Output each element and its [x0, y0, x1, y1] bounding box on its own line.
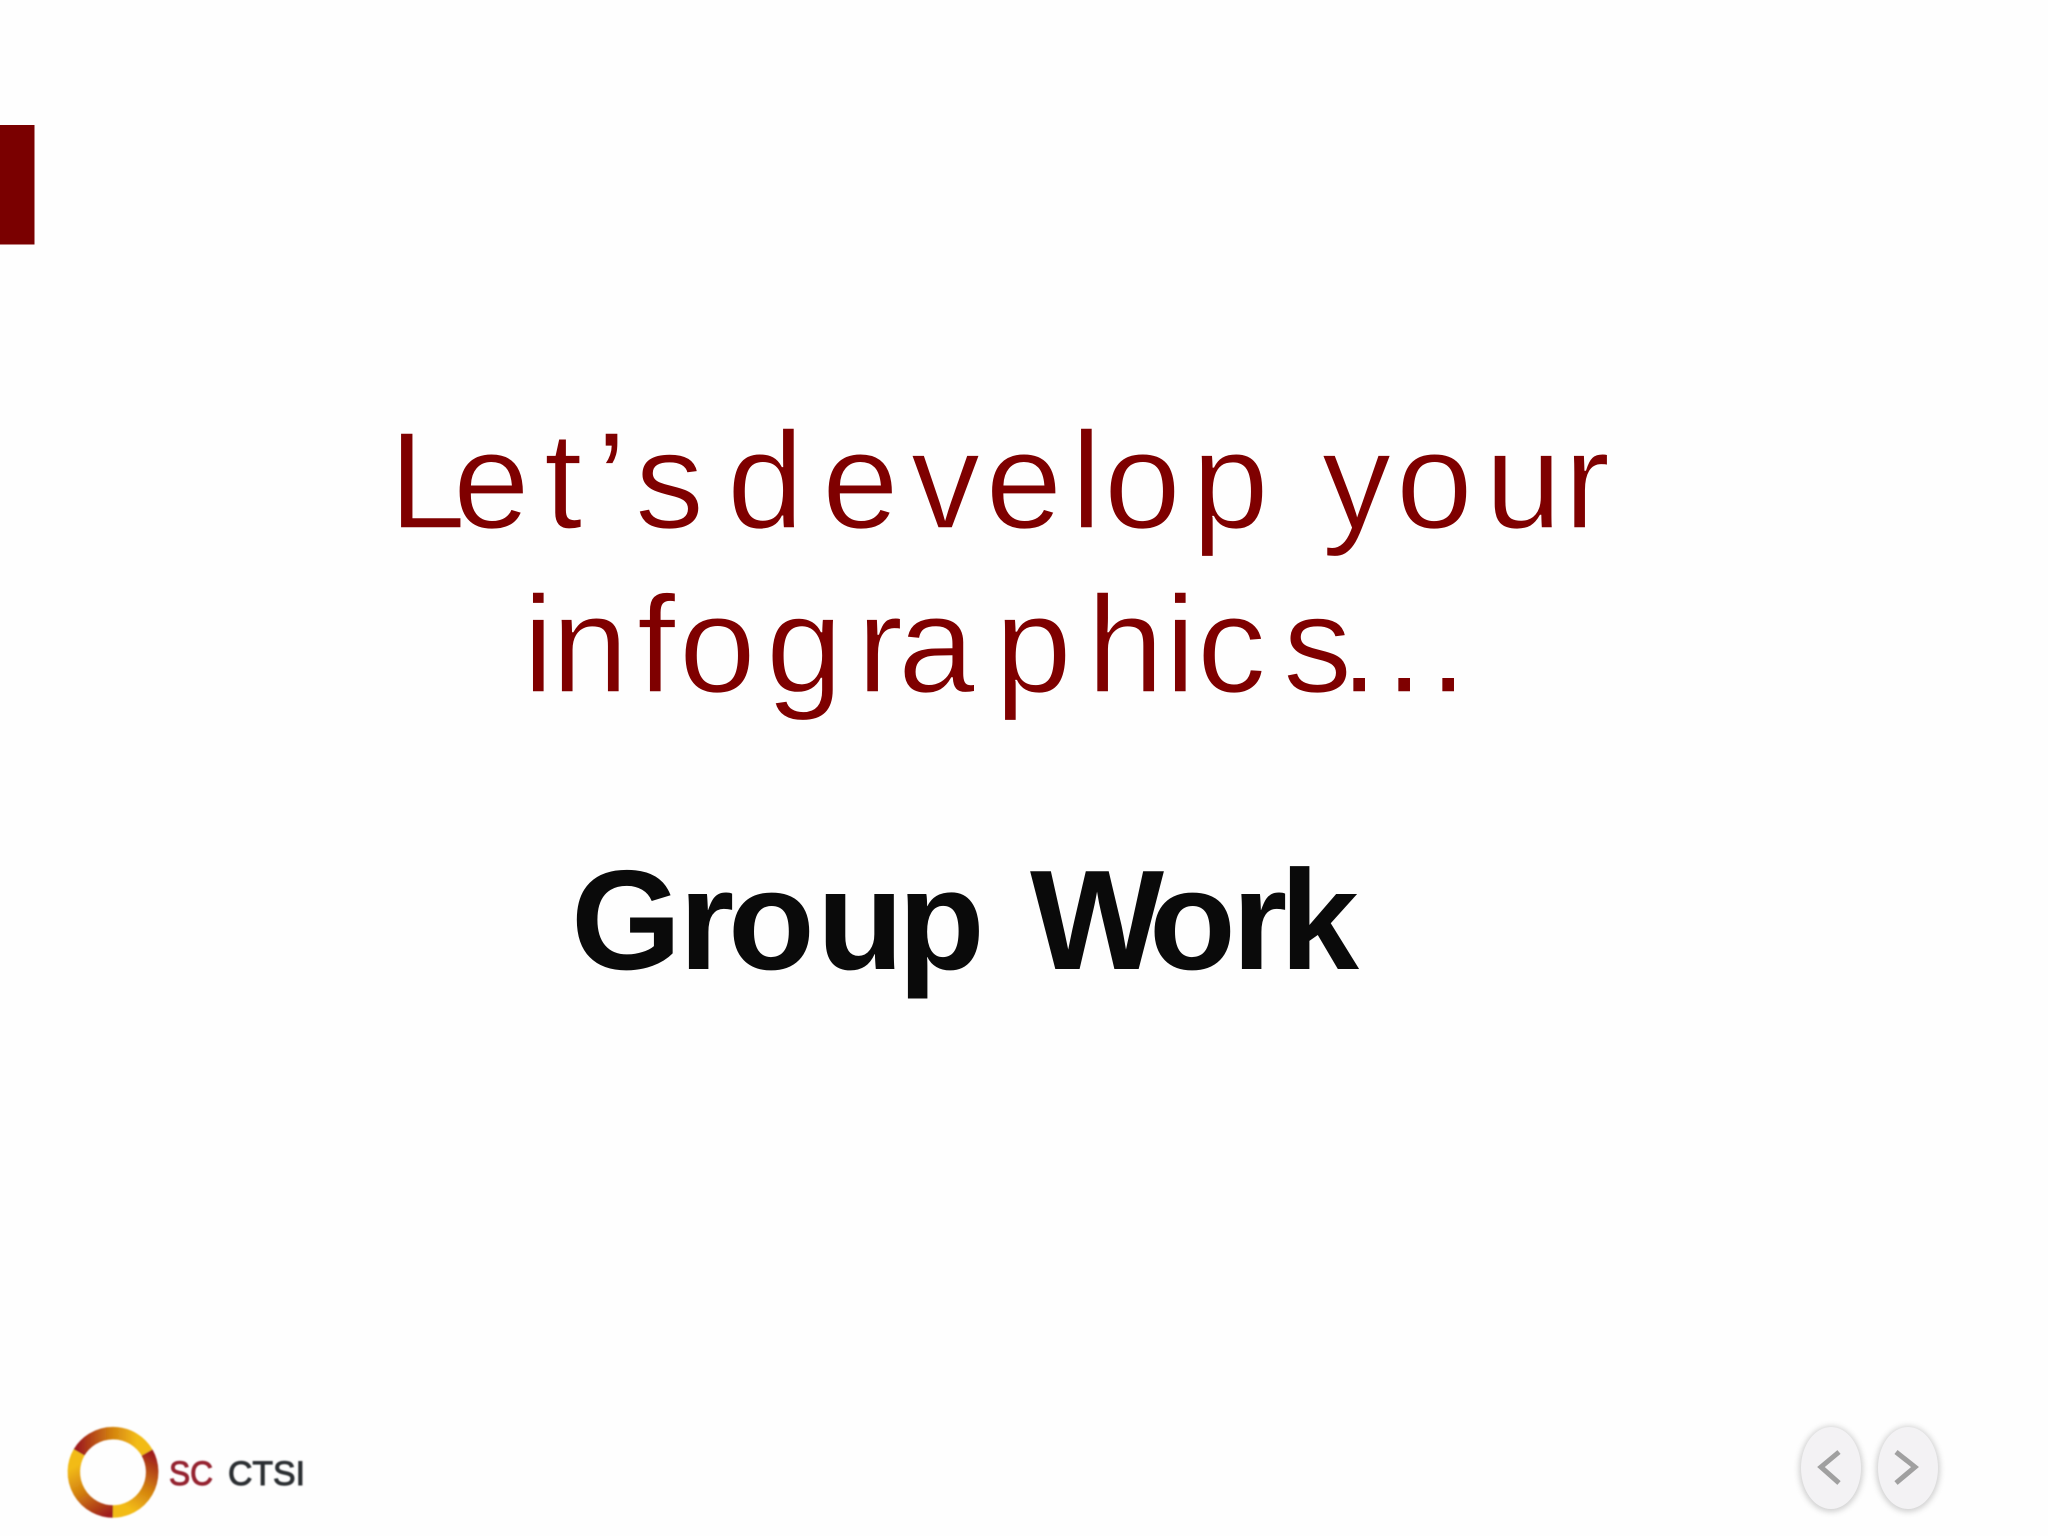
title: infographics... [523, 568, 1467, 722]
previous button [1799, 1426, 1863, 1512]
logo ring [74, 1433, 152, 1512]
subtitle: group work [571, 841, 1360, 1000]
next button [1876, 1426, 1940, 1512]
logo: SC CTSI [74, 1433, 305, 1512]
subtitle: group work: Work [1030, 841, 1360, 1000]
title: your [1322, 404, 1610, 558]
title: develop [727, 404, 1269, 558]
title: Let’s [389, 404, 704, 558]
title [389, 404, 1610, 722]
subtitle: group work: Group [571, 841, 985, 1000]
logo text: CTSI [228, 1455, 305, 1493]
accent bar [0, 125, 34, 244]
logo text: SC [169, 1455, 213, 1493]
